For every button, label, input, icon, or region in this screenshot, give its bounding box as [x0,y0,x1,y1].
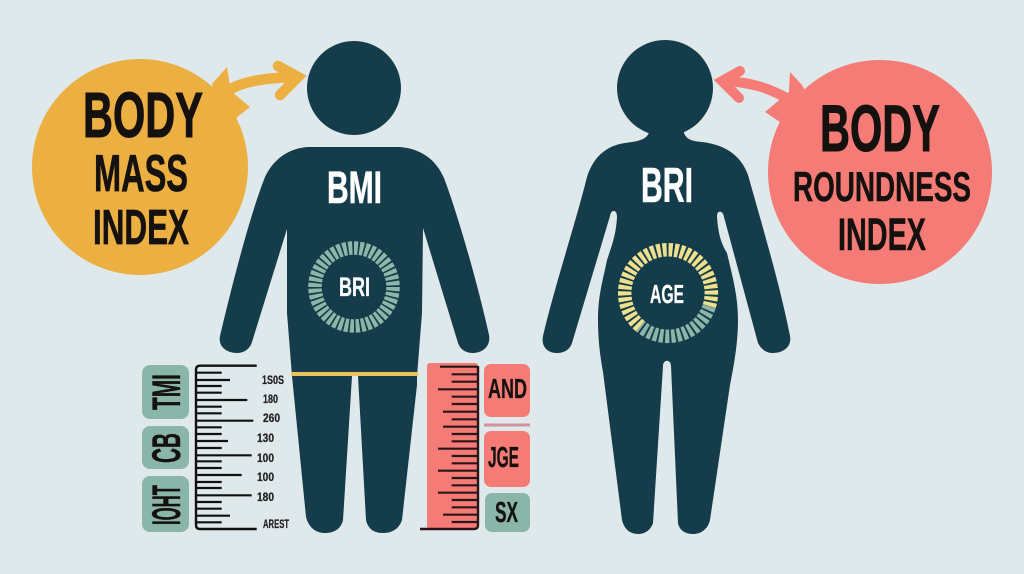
chart: right ruler scale [420,363,478,529]
waist band [291,372,418,376]
label: BRI: BRI [641,159,693,213]
tag: JGE: JGE [488,442,519,474]
label: BMI: BMI [327,162,382,213]
panel: right measurement labels [484,364,530,532]
tag: JGE [484,431,530,487]
scale numbers: 180 [263,392,278,406]
heading: body: BODY [820,91,940,165]
scale numbers: 180 [257,490,274,504]
gauge: age ring [625,250,711,336]
figure: left body silhouette [220,41,489,533]
panel: left measurement labels [142,365,189,532]
heading: body: BODY [83,79,203,151]
scale numbers: 100 [257,451,274,465]
tag: CB: CB [145,433,189,463]
figure: right body silhouette [543,40,790,534]
label: index: INDEX [838,209,926,260]
label: index: INDEX [93,201,189,255]
tag: CB [142,426,189,469]
scale numbers: 1S0S [262,373,284,387]
tag: AND: AND [488,373,527,404]
tag: SX: SX [495,497,518,529]
scale numbers: 130 [257,431,274,445]
tag: TMI [142,365,189,419]
arrow: body mass index to head [226,66,298,95]
scale numbers: 260 [263,411,280,425]
arrow: body roundness index to head [722,71,790,100]
scale numbers: AREST [263,517,289,531]
chart: left ruler scale [196,366,289,531]
tag: SX [485,493,530,532]
tag: AND [484,364,530,417]
panel: body roundness index badge [722,60,992,284]
scale numbers: 100 [257,470,274,484]
label: mass: MASS [94,145,188,203]
gauge: BRI ring: BRI [339,272,370,302]
tag: TMI: TMI [145,374,189,410]
tag: IOHT: IOHT [145,485,189,525]
tag: IOHT [142,476,189,532]
gauge: BRI ring [315,248,393,326]
panel: body mass index badge [32,59,298,275]
scale numbers [257,373,289,531]
gauge: age ring: AGE [650,279,684,309]
